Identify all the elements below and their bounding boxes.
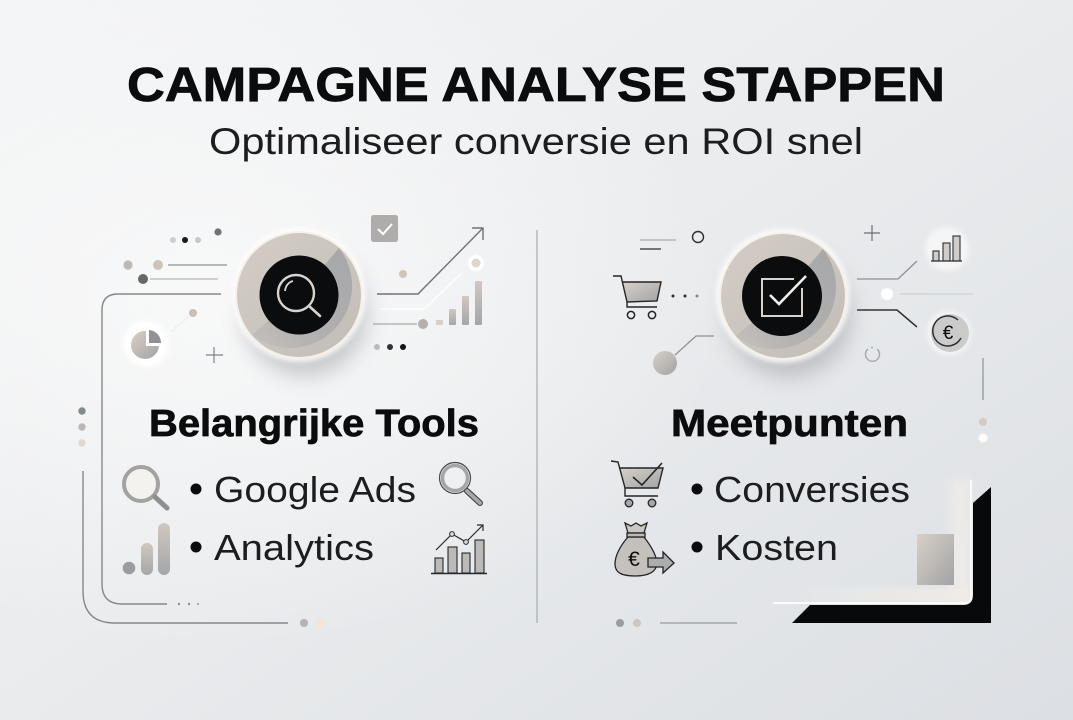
icon: search medallion [232, 228, 367, 376]
heading: Meetpunten [671, 403, 908, 445]
list: tools: Google Ads [214, 469, 416, 510]
panel: belangrijke tools [78, 215, 487, 628]
subtitle: Optimaliseer conversie en ROI snel [209, 121, 863, 162]
decorative lines and dots right [616, 225, 988, 627]
title: CAMPAGNE ANALYSE STAPPEN [127, 59, 945, 112]
gradient rectangle [917, 534, 954, 585]
growth arrow lines [373, 228, 483, 324]
divider [536, 230, 538, 623]
icon: magnifier right [440, 462, 480, 503]
icon: plus [206, 347, 223, 363]
icon: analytics bars [123, 523, 170, 575]
list: metrics: Kosten [715, 527, 838, 568]
frame lines left [83, 294, 288, 623]
icon: money bag: € [628, 548, 640, 571]
list: metrics [692, 469, 910, 568]
list: tools: Analytics [214, 527, 374, 568]
icon: shopping cart [613, 276, 661, 319]
icon: euro badge [927, 311, 971, 355]
heading: Belangrijke Tools [149, 403, 479, 445]
list: metrics: Conversies [714, 469, 910, 510]
icon: trend bar chart [431, 525, 487, 574]
list: tools [190, 469, 416, 568]
icon: euro badge: € [943, 323, 954, 344]
icon: cart with check [611, 461, 663, 507]
icon: bar chart badge [925, 227, 969, 271]
mini bar chart [374, 255, 484, 350]
icon: check badge [371, 215, 398, 242]
panel: meetpunten [611, 225, 991, 627]
icon: magnifier left [124, 467, 167, 508]
icon: money bag [615, 523, 674, 576]
icon: pie chart [123, 321, 169, 367]
icon: check medallion [716, 229, 851, 377]
icon: corner frame [773, 480, 991, 623]
decorative dots left [78, 228, 326, 628]
